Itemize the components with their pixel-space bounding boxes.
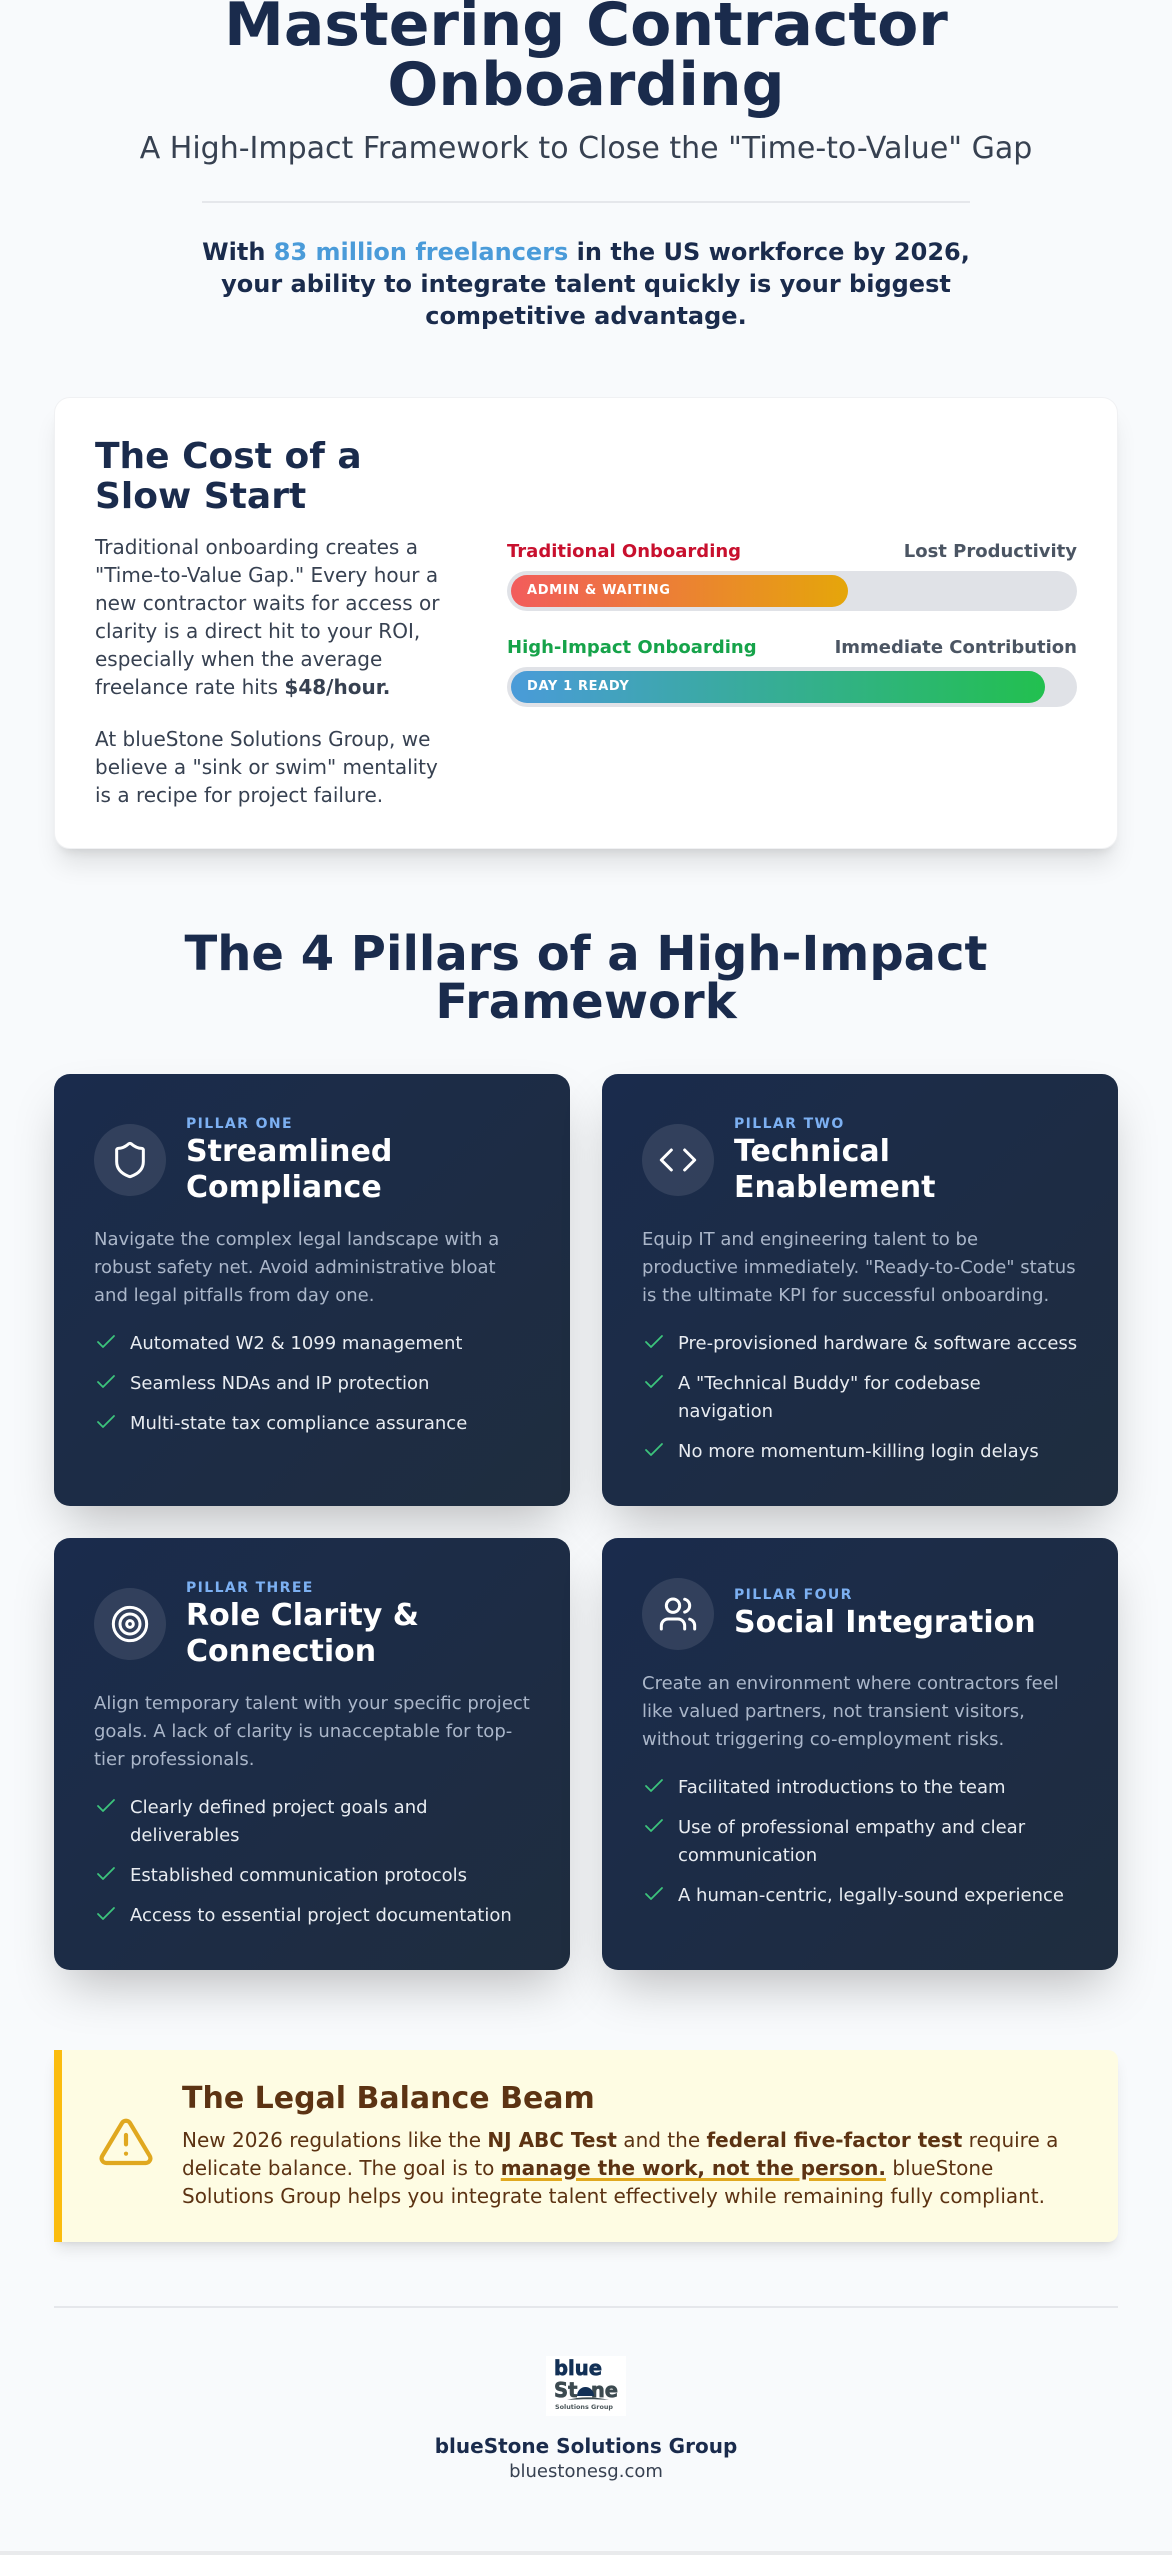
checklist item: Automated W2 & 1099 management [130, 1333, 462, 1354]
description: productive immediately. "Ready-to-Code" status [642, 1257, 1076, 1278]
subtitle: A High-Impact Framework to Close the "Time-to-Value" Gap [140, 131, 1032, 166]
bar: high-impact onboarding: Immediate Contribution [835, 637, 1077, 658]
bar: traditional onboarding: Lost Productivity [904, 541, 1077, 562]
callout text [182, 2128, 1058, 2208]
text: sink or swim: At blueStone Solutions Group, we [95, 727, 430, 751]
text: traditional onboarding: clarity is a direct hit to your ROI, [95, 619, 420, 643]
checklist item [645, 1817, 1026, 1866]
footer: company name: blueStone Solutions Group [435, 2434, 737, 2458]
pillar title: Enablement [734, 1170, 936, 1205]
description [642, 1229, 1076, 1306]
panel: pillar two [602, 1074, 1118, 1506]
logo: blueStone Solutions Group [554, 2356, 618, 2411]
description: like valued partners, not transient visitors, [642, 1701, 1025, 1722]
callout heading: The Legal Balance Beam [182, 2081, 595, 2116]
pillar title: Technical [734, 1134, 890, 1169]
label: PILLAR TWO [734, 1116, 845, 1132]
lead statement: competitive advantage. [425, 302, 747, 330]
section heading: pillars: Framework [435, 974, 737, 1030]
checklist item: Established communication protocols [130, 1865, 467, 1886]
description: Align temporary talent with your specific project [94, 1693, 530, 1714]
section heading: pillars [184, 926, 987, 1030]
description [94, 1229, 499, 1306]
section heading: pillars: The 4 Pillars of a High-Impact [185, 926, 987, 982]
bar: traditional onboarding: Traditional Onboarding [507, 541, 741, 562]
pillar title: Compliance [186, 1170, 382, 1205]
description: goals. A lack of clarity is unacceptable for top- [94, 1721, 512, 1742]
lead statement: your ability to integrate talent quickly is your biggest [221, 270, 951, 298]
checklist item: Facilitated introductions to the team [678, 1777, 1006, 1798]
checklist item: communication [678, 1845, 817, 1866]
heading: cost of a slow start: Slow Start [95, 476, 306, 517]
panel: pillar four [602, 1538, 1118, 1970]
callout: legal balance beam [54, 2050, 1118, 2242]
text: traditional onboarding: "Time-to-Value Gap." Every hour a [95, 563, 438, 587]
checklist item: No more momentum-killing login delays [678, 1441, 1039, 1462]
icon: warning triangle [99, 2118, 152, 2166]
text: traditional onboarding: freelance rate hits $48/hour. [95, 675, 390, 699]
callout text: Solutions Group helps you integrate talent effectively while remaining fully compliant. [182, 2184, 1045, 2208]
title [224, 0, 948, 120]
checklist item: Multi-state tax compliance assurance [130, 1413, 467, 1434]
heading: cost of a slow start [95, 436, 362, 517]
text: sink or swim [95, 727, 438, 807]
label: PILLAR THREE [186, 1580, 314, 1596]
checklist item: Use of professional empathy and clear [678, 1817, 1025, 1838]
label: PILLAR FOUR [734, 1587, 853, 1603]
panel: pillar one [54, 1074, 570, 1506]
icon: shield [94, 1124, 166, 1196]
label: PILLAR ONE [186, 1116, 293, 1132]
footer: website: bluestonesg.com [509, 2461, 663, 2482]
text: traditional onboarding [94, 535, 440, 699]
description: robust safety net. Avoid administrative bloat [94, 1257, 496, 1278]
text: traditional onboarding: Traditional onboarding creates a [95, 535, 418, 559]
description: Equip IT and engineering talent to be [642, 1229, 978, 1250]
bar: traditional onboarding [507, 541, 1077, 611]
bar: high-impact onboarding [507, 637, 1077, 707]
text: traditional onboarding: new contractor waits for access or [95, 591, 439, 615]
pillar title [734, 1134, 936, 1205]
text: sink or swim: is a recipe for project failure. [95, 783, 383, 807]
checklist item: Pre-provisioned hardware & software access [678, 1333, 1077, 1354]
checklist item [645, 1373, 981, 1422]
bar: high-impact onboarding: DAY 1 READY [527, 679, 629, 694]
panel: pillar three [54, 1538, 570, 1970]
pillar title: Streamlined [186, 1134, 392, 1169]
title: Onboarding [387, 50, 785, 120]
description: without triggering co-employment risks. [642, 1729, 1004, 1750]
icon: code [642, 1124, 714, 1196]
description [94, 1693, 530, 1770]
lead statement: With 83 million freelancers in the US workforce by 2026, [202, 238, 970, 266]
text: sink or swim: believe a "sink or swim" mentality [95, 755, 438, 779]
callout text: delicate balance. The goal is to manage the work, not the person. blueStone [182, 2156, 993, 2180]
pillar title [186, 1598, 419, 1669]
description: and legal pitfalls from day one. [94, 1285, 374, 1306]
checklist item: Seamless NDAs and IP protection [130, 1373, 429, 1394]
panel: cost of a slow start [54, 397, 1118, 849]
checklist item [97, 1797, 428, 1846]
checklist item: Clearly defined project goals and [130, 1797, 428, 1818]
callout text: New 2026 regulations like the NJ ABC Test and the federal five-factor test require a [182, 2128, 1058, 2152]
icon: target [94, 1588, 166, 1660]
checklist item: Access to essential project documentation [130, 1905, 512, 1926]
text: traditional onboarding: especially when the average [95, 647, 382, 671]
lead statement [202, 238, 970, 330]
bar: high-impact onboarding: High-Impact Onboarding [507, 637, 757, 658]
bar: traditional onboarding: ADMIN & WAITING [527, 583, 671, 598]
icon: people [642, 1578, 714, 1650]
pillar title: Role Clarity & [186, 1598, 419, 1633]
description: tier professionals. [94, 1749, 254, 1770]
pillar title: Social Integration [734, 1605, 1036, 1640]
checklist item: A "Technical Buddy" for codebase [678, 1373, 981, 1394]
logo: blueStone Solutions Group: Stone [554, 2378, 618, 2402]
checklist item: navigation [678, 1401, 773, 1422]
description: is the ultimate KPI for successful onboarding. [642, 1285, 1049, 1306]
logo: blueStone Solutions Group: blue [554, 2356, 602, 2380]
description: Create an environment where contractors feel [642, 1673, 1059, 1694]
heading: cost of a slow start: The Cost of a [95, 436, 362, 477]
logo: blueStone Solutions Group: Solutions Group [555, 2404, 614, 2411]
pillar title: Connection [186, 1634, 376, 1669]
description [642, 1673, 1059, 1750]
description: Navigate the complex legal landscape with a [94, 1229, 499, 1250]
checklist item: deliverables [130, 1825, 240, 1846]
checklist item: A human-centric, legally-sound experience [678, 1885, 1064, 1906]
pillar title [186, 1134, 392, 1205]
